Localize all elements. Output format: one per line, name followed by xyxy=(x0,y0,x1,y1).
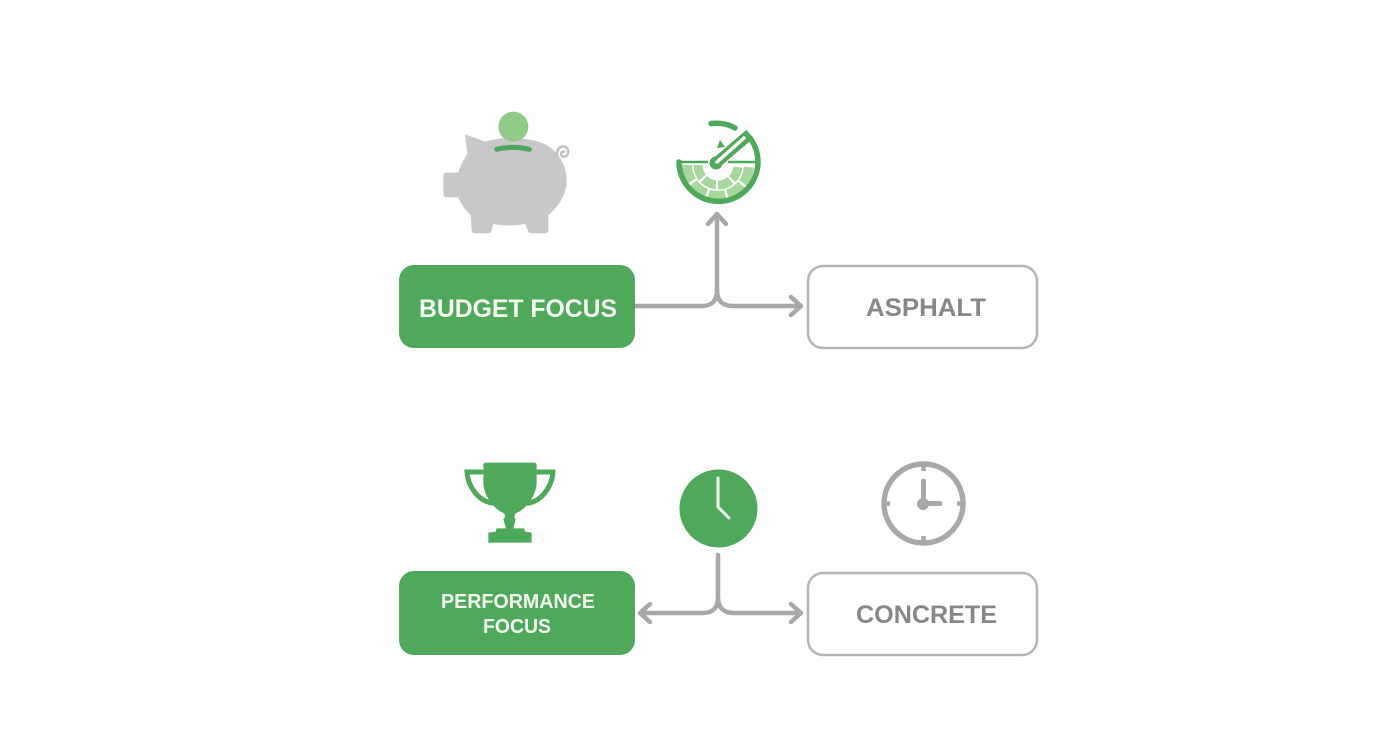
label: concrete: CONCRETE xyxy=(856,601,997,629)
icon: speedometer over paving xyxy=(679,123,758,201)
piggy tail xyxy=(557,147,568,157)
piggy body xyxy=(443,134,567,233)
icon: trophy xyxy=(467,463,553,543)
coin slot xyxy=(497,147,529,149)
label: budget focus: BUDGET FOCUS xyxy=(419,295,617,323)
clock hands and hub xyxy=(924,481,940,504)
label: performance: PERFORMANCE xyxy=(441,591,595,613)
box: budget focus xyxy=(399,265,635,348)
box: performance focus xyxy=(399,571,635,655)
arrow: budget focus to gauge and asphalt xyxy=(636,214,801,315)
arrow: clock to performance focus and concrete xyxy=(640,555,801,622)
box: asphalt xyxy=(808,266,1037,348)
box: concrete xyxy=(808,573,1037,655)
icon: green clock xyxy=(680,470,758,548)
trophy handles xyxy=(467,472,553,503)
gauge needle xyxy=(716,134,750,163)
label: focus: FOCUS xyxy=(483,616,551,638)
gauge rim xyxy=(679,138,758,201)
clock hands xyxy=(718,478,729,518)
label: asphalt: ASPHALT xyxy=(866,294,986,322)
icon: gray clock xyxy=(884,464,963,543)
clock ticks xyxy=(884,464,963,543)
icon: piggy bank xyxy=(443,112,568,233)
trophy cup xyxy=(483,463,537,543)
gauge baseline xyxy=(679,161,756,163)
gauge top arc xyxy=(711,123,735,128)
coin xyxy=(498,112,528,142)
pale paving segments xyxy=(687,165,749,196)
